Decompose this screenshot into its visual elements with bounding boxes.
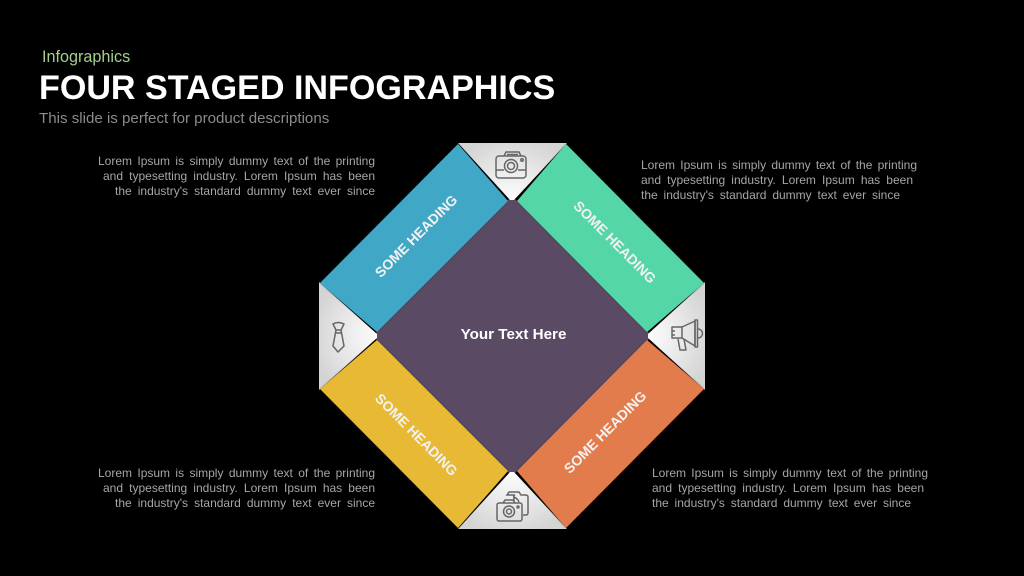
center text: Your Text Here (461, 326, 566, 343)
heading: SOME HEADING (571, 198, 660, 287)
heading: SOME HEADING (561, 387, 650, 476)
eyebrow label: Infographics (42, 48, 130, 66)
text block: bottom left: and typesetting industry. Lorem Ipsum has been (103, 481, 375, 495)
heading: SOME HEADING (372, 191, 461, 280)
panel: bottom triangle (458, 472, 567, 529)
icon: megaphone (672, 320, 702, 350)
panel: green heading band (517, 144, 704, 332)
icon: two cameras (497, 492, 528, 521)
title: FOUR STAGED INFOGRAPHICS (39, 69, 555, 107)
heading: SOME HEADING (372, 390, 461, 479)
panel: right triangle (648, 282, 705, 390)
text block: bottom right: Lorem Ipsum is simply dummy text of the printing (652, 466, 928, 480)
panel: left triangle (319, 282, 377, 390)
panel: yellow heading band (320, 340, 508, 528)
text block: top left: Lorem Ipsum is simply dummy text of the printing (98, 154, 375, 168)
panel: orange heading band (517, 340, 704, 528)
text block: top right: the industry's standard dummy text ever since (641, 188, 900, 202)
panel: center diamond (373, 196, 652, 476)
text block: top right (641, 158, 917, 202)
panel: top triangle (458, 143, 567, 200)
text block: bottom right: and typesetting industry. Lorem Ipsum has been (652, 481, 924, 495)
icon: camera (496, 152, 526, 178)
panel: blue heading band (320, 144, 508, 332)
text block: bottom right (652, 466, 928, 510)
text block: bottom left: the industry's standard dummy text ever since (115, 496, 375, 510)
icon: necktie (333, 322, 344, 352)
text block: bottom left (98, 466, 375, 510)
subtitle: This slide is perfect for product descriptions (39, 110, 329, 127)
text block: top right: Lorem Ipsum is simply dummy text of the printing (641, 158, 917, 172)
text block: bottom right: the industry's standard dummy text ever since (652, 496, 911, 510)
text block: top left: and typesetting industry. Lorem Ipsum has been (103, 169, 375, 183)
text block: top left: the industry's standard dummy text ever since (115, 184, 375, 198)
text block: top right: and typesetting industry. Lorem Ipsum has been (641, 173, 913, 187)
text block: bottom left: Lorem Ipsum is simply dummy text of the printing (98, 466, 375, 480)
text block: top left (98, 154, 375, 198)
